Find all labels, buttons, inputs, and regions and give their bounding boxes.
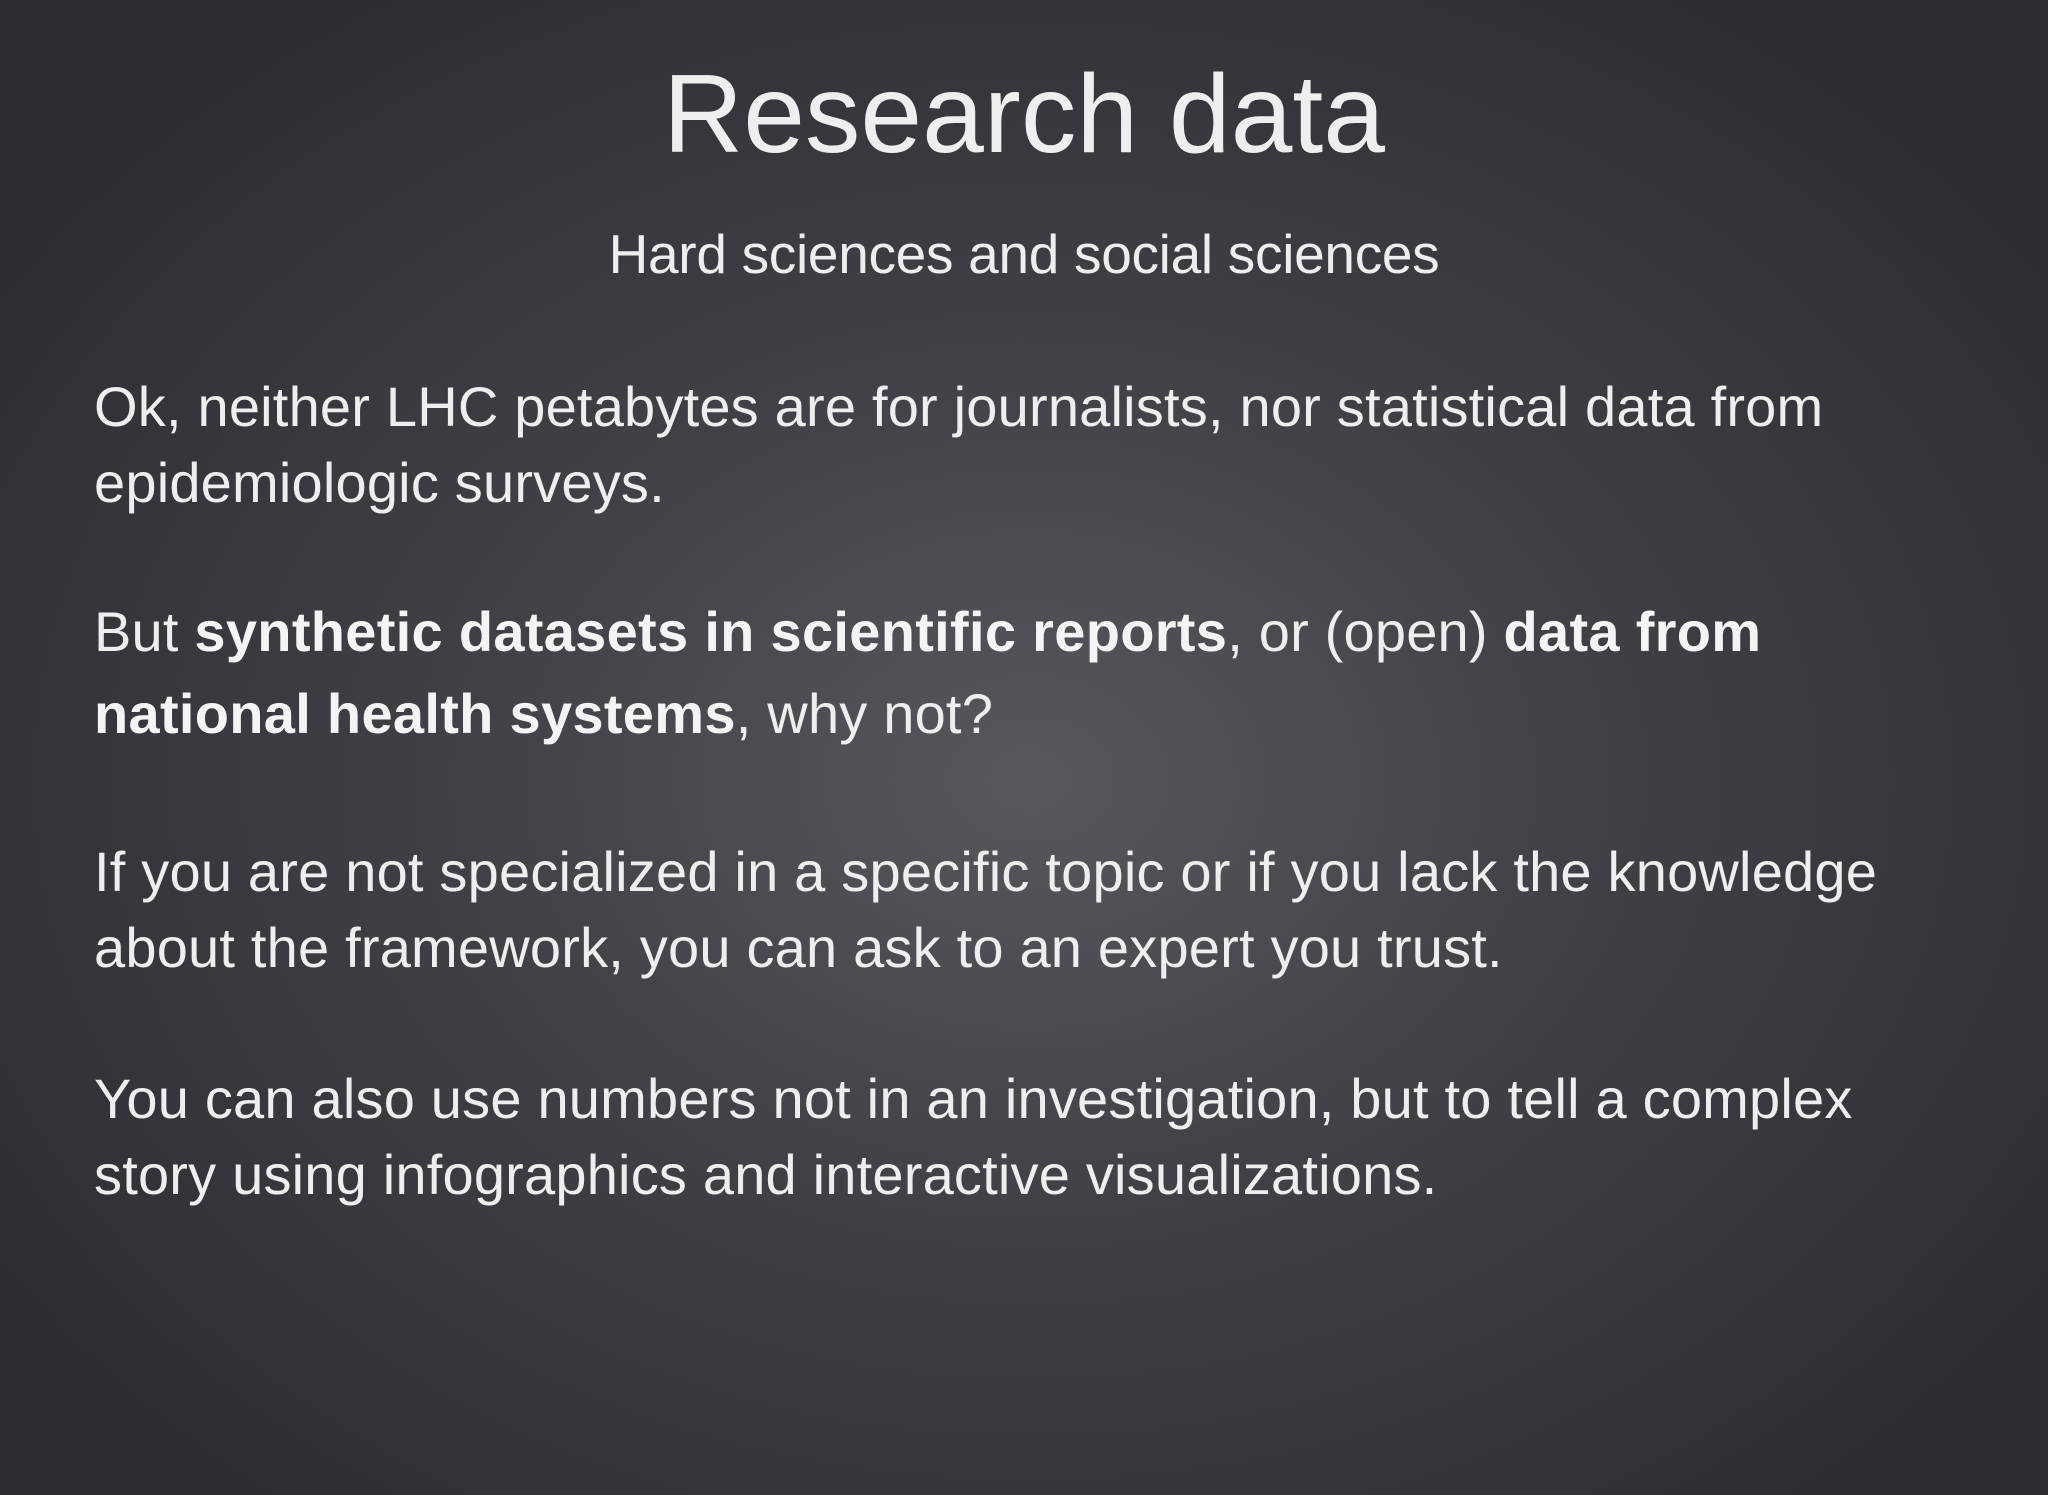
paragraph 2: national health systems, why not? — [94, 682, 993, 745]
paragraph 1: epidemiologic surveys. — [94, 451, 665, 514]
paragraph 3: If you are not specialized in a specific topic or if you lack the knowledge — [94, 840, 1877, 903]
paragraph 3 — [94, 840, 1877, 979]
paragraph 4 — [94, 1067, 1853, 1206]
paragraph 3: about the framework, you can ask to an expert you trust. — [94, 916, 1503, 979]
subtitle: Hard sciences and social sciences — [609, 223, 1439, 285]
paragraph 2 — [94, 600, 1761, 745]
paragraph 1: Ok, neither LHC petabytes are for journalists, nor statistical data from — [94, 375, 1823, 438]
paragraph 1 — [94, 375, 1823, 514]
title: Research data — [663, 52, 1385, 176]
paragraph 4: You can also use numbers not in an investigation, but to tell a complex — [94, 1067, 1853, 1130]
paragraph 4: story using infographics and interactive visualizations. — [94, 1143, 1437, 1206]
paragraph 2: But synthetic datasets in scientific reports, or (open) data from — [94, 600, 1761, 663]
